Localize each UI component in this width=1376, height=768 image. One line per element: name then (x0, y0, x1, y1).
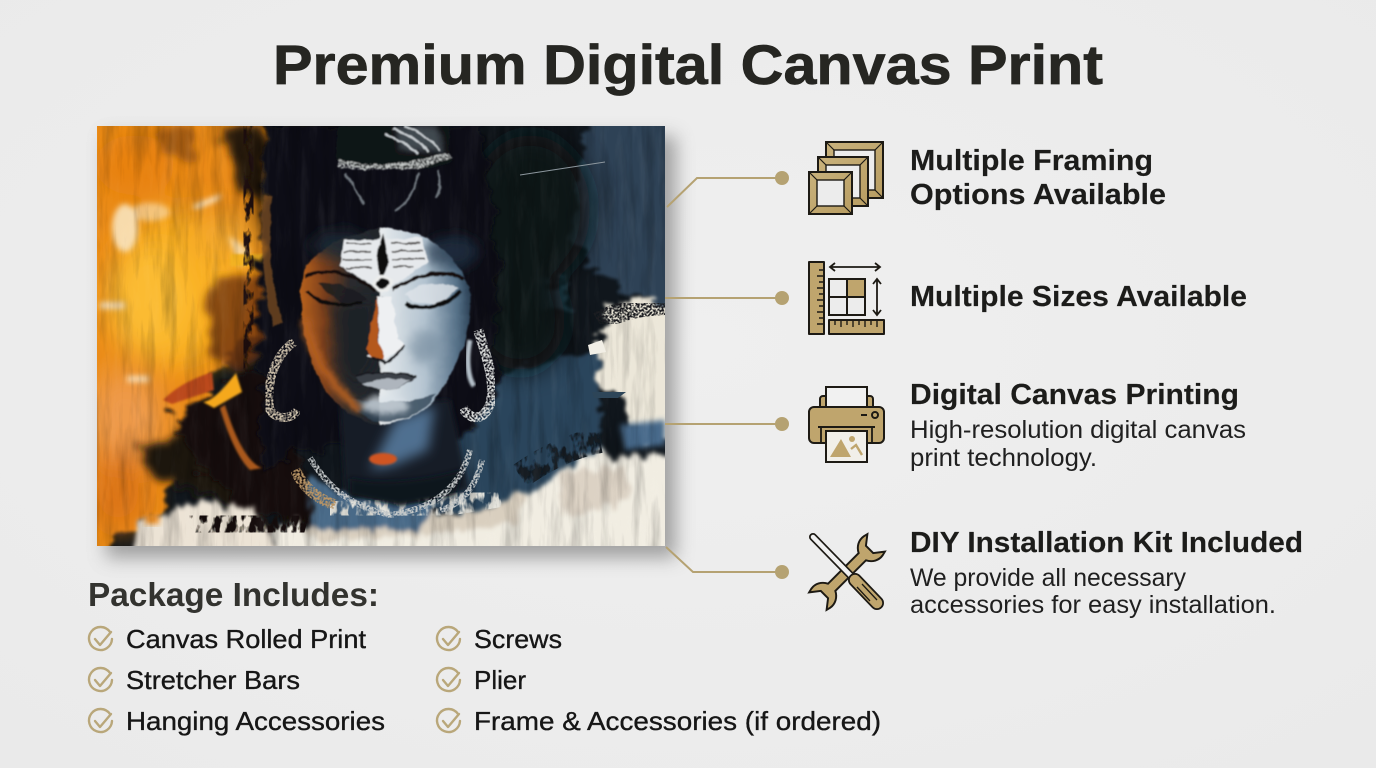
figure: hair and topknot (266, 126, 452, 325)
face left side (301, 227, 382, 424)
white and beige bottom (130, 444, 665, 546)
item: frame and accessories: Frame & Accessories (if ordered) (474, 706, 881, 736)
feature: framing options: Multiple Framing (910, 145, 1153, 177)
canvas shadow (106, 136, 676, 558)
feature: sizes: Multiple Sizes Available (910, 281, 1247, 313)
feature: digital canvas printing: print technology. (910, 444, 1097, 472)
item: hanging accessories: Hanging Accessories (126, 706, 385, 736)
white flecks (520, 162, 605, 175)
painting background (97, 126, 665, 546)
figure: face (301, 227, 478, 424)
brows (304, 272, 376, 291)
eyes (307, 291, 362, 305)
earrings (269, 330, 492, 418)
left hair highlight (203, 373, 262, 470)
pale strokes in orange (100, 194, 250, 382)
icon: rulers and size grid (809, 262, 884, 334)
figure: neck (340, 400, 470, 505)
feature: digital canvas printing: Digital Canvas Printing (910, 379, 1239, 411)
icon: crossed tools (808, 533, 886, 611)
package list: left column (89, 624, 385, 736)
red-orange hair stroke (163, 372, 214, 404)
speckled cloud edge (598, 305, 665, 322)
scumbled hair edge (245, 126, 252, 372)
feature: DIY installation kit (910, 527, 1303, 619)
cream clouds right (591, 294, 665, 446)
item: screws: Screws (474, 624, 562, 654)
necklaces (310, 450, 470, 515)
nose (366, 296, 404, 360)
face right side (380, 227, 471, 424)
item: screws (437, 624, 562, 654)
heading: package includes: Package Includes: (88, 576, 379, 613)
forehead tilak (340, 234, 428, 306)
title: Premium Digital Canvas Print (273, 33, 1103, 96)
lips (355, 373, 416, 390)
panel: canvas painting (97, 126, 665, 546)
feature: digital canvas printing (910, 379, 1246, 472)
feature: digital canvas printing: High-resolution digital canvas (910, 416, 1246, 444)
item: canvas rolled print: Canvas Rolled Print (126, 624, 367, 654)
feature: DIY installation kit: accessories for easy installation. (910, 591, 1276, 619)
orange painted field (97, 126, 270, 546)
brown scumble mid-left (140, 126, 280, 540)
item: plier: Plier (474, 665, 526, 695)
hair bead band (338, 154, 451, 168)
feature: framing options: Options Available (910, 179, 1166, 211)
forehead shade (426, 236, 478, 268)
icon: picture frames (809, 142, 883, 214)
cheek shadow (330, 300, 376, 395)
item: stretcher bars: Stretcher Bars (126, 665, 300, 695)
dark hair lower left (170, 370, 320, 530)
connector: installation (666, 547, 789, 579)
painted texture overlay (97, 126, 665, 546)
feature: DIY installation kit: DIY Installation Kit Included (910, 527, 1303, 559)
connector: sizes (665, 291, 789, 305)
connector: framing (667, 171, 789, 207)
feature: framing options (910, 145, 1166, 211)
icon: printer (809, 387, 884, 462)
package list: right column (437, 624, 881, 736)
dark hair mass (258, 126, 500, 470)
scumbled bottom edges (190, 518, 305, 530)
navy right side (436, 126, 665, 517)
eye lids (318, 283, 368, 303)
item: plier (437, 665, 526, 695)
connector: printing (665, 417, 789, 431)
feature: DIY installation kit: We provide all necessary (910, 564, 1186, 592)
